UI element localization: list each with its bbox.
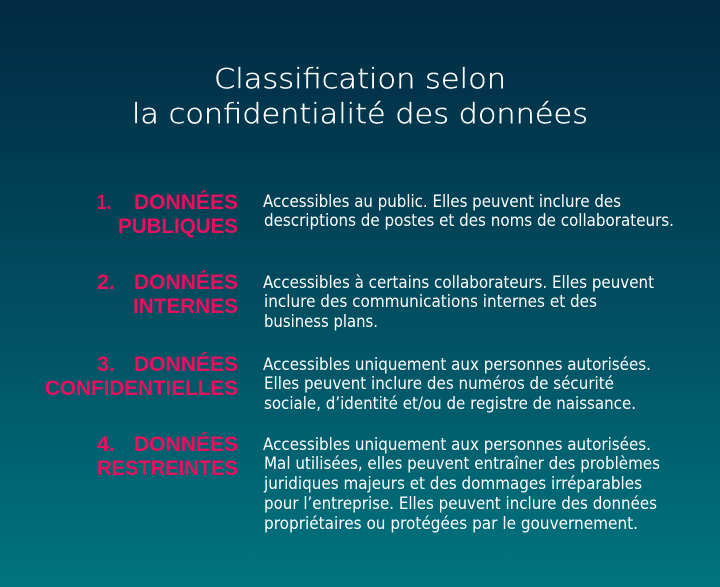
heading: 2. données internes: INTERNES bbox=[133, 295, 238, 318]
panel: données internes bbox=[97, 271, 654, 331]
title bbox=[132, 62, 588, 130]
description: données restreintes: pour l’entreprise. Elles peuvent inclure des données bbox=[264, 494, 657, 513]
panel: données publiques bbox=[97, 191, 674, 238]
description: données internes: inclure des communications internes et des bbox=[264, 292, 597, 311]
description: données internes: business plans. bbox=[264, 312, 378, 331]
heading: 4. données restreintes bbox=[97, 433, 238, 480]
description: données confidentielles: sociale, d’identité et/ou de registre de naissance. bbox=[264, 394, 636, 413]
description: données internes bbox=[263, 273, 654, 331]
heading: 2. données internes bbox=[97, 271, 238, 318]
description: données restreintes: juridiques majeurs et des dommages irréparables bbox=[263, 474, 642, 493]
heading: 4. données restreintes: DONNÉES bbox=[134, 433, 238, 456]
heading: 1. données publiques: DONNÉES bbox=[134, 191, 238, 214]
heading: 2. données internes: 2. bbox=[97, 271, 115, 294]
heading: 1. données publiques: 1. bbox=[97, 191, 111, 214]
description: données publiques: descriptions de postes et des noms de collaborateurs. bbox=[264, 211, 674, 230]
heading: 3. données confidentielles: CONFIDENTIELLES bbox=[45, 377, 238, 400]
heading: 3. données confidentielles bbox=[45, 353, 238, 400]
title: la confidentialité des données bbox=[132, 97, 588, 130]
heading: 4. données restreintes: RESTREINTES bbox=[97, 457, 238, 480]
description: données publiques bbox=[263, 192, 674, 230]
description: données confidentielles bbox=[263, 355, 651, 413]
heading: 1. données publiques: PUBLIQUES bbox=[118, 215, 238, 238]
heading: 2. données internes: DONNÉES bbox=[134, 271, 238, 294]
description: données restreintes: Accessibles uniquement aux personnes autorisées. bbox=[263, 435, 651, 454]
description: données confidentielles: Accessibles uniquement aux personnes autorisées. bbox=[263, 355, 651, 374]
panel: données restreintes bbox=[97, 433, 660, 533]
heading: 3. données confidentielles: 3. bbox=[97, 353, 115, 376]
title: Classification selon bbox=[214, 62, 506, 95]
panel: données confidentielles bbox=[45, 353, 651, 413]
description: données publiques: Accessibles au public. Elles peuvent inclure des bbox=[263, 192, 621, 211]
description: données restreintes bbox=[263, 435, 660, 533]
heading: 3. données confidentielles: DONNÉES bbox=[134, 353, 238, 376]
description: données confidentielles: Elles peuvent inclure des numéros de sécurité bbox=[264, 374, 614, 393]
description: données restreintes: Mal utilisées, elles peuvent entraîner des problèmes bbox=[264, 454, 660, 473]
heading: 4. données restreintes: 4. bbox=[97, 433, 115, 456]
description: données internes: Accessibles à certains collaborateurs. Elles peuvent bbox=[263, 273, 654, 292]
heading: 1. données publiques bbox=[97, 191, 238, 238]
description: données restreintes: propriétaires ou protégées par le gouvernement. bbox=[264, 514, 638, 533]
